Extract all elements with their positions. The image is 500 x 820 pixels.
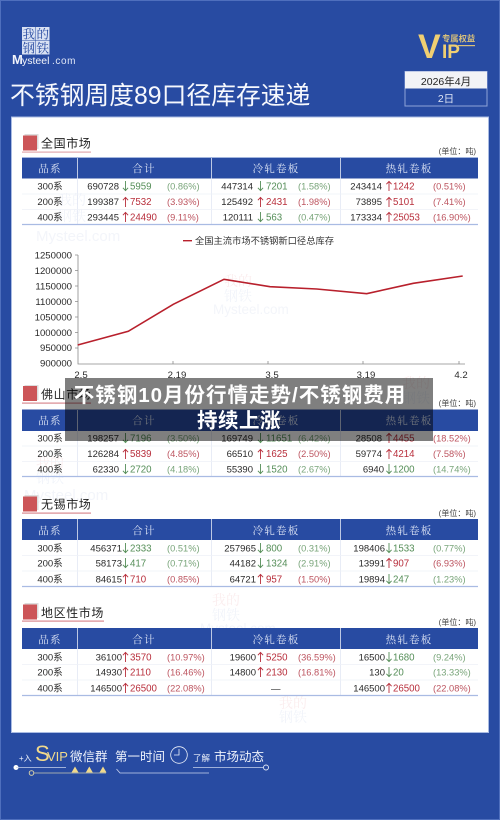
table: 全国市场: (1.98%) [298,197,331,207]
line chart: 900000 [40,358,72,370]
table: 佛山市场 [22,410,478,476]
logo: Mysteel: 我 [22,26,36,42]
section heading: 地区性市场: 地区性市场 [41,605,104,620]
table: 佛山市场: 200系 [37,449,63,460]
table: 地区性市场: 冷轧卷板 [253,633,299,646]
table: 无锡市场: 710 [130,574,147,586]
line chart: 4.2 [454,370,468,381]
table: 无锡市场: 44182 [230,558,256,570]
table: 无锡市场: 257965 [224,544,256,554]
table: 全国市场: (0.51%) [433,182,466,192]
table: 佛山市场: (14.74%) [433,464,471,474]
table: 全国市场: 合计 [132,162,156,175]
table: 地区性市场: (13.33%) [433,668,471,678]
unit label: (单位：吨) [439,508,476,518]
watermarks [24,193,430,726]
logo: Mysteel: 钢 [22,42,35,56]
table: 地区性市场: 300系 [37,652,63,664]
logo: Mysteel: .com [52,56,76,67]
section heading: 佛山市场: 佛山市场 [41,386,91,402]
footer decoration lines [14,765,268,775]
watermarks: Mysteel.com [200,621,276,636]
table: 佛山市场: (4.18%) [167,464,200,474]
footer banner: 市场动态 [214,749,264,764]
table: 无锡市场: 热轧卷板 [386,524,432,537]
table: 地区性市场: 146500 [353,684,385,694]
table: 全国市场: 563 [266,212,282,224]
table: 佛山市场: 28508 [356,434,382,444]
table: 全国市场: 300系 [37,182,63,192]
table: 全国市场: 400系 [37,212,63,224]
watermarks: Mysteel.com [24,487,108,504]
table: 无锡市场: 19894 [359,574,385,586]
table: 地区性市场: 400系 [37,684,63,694]
table: 全国市场: (0.47%) [298,212,331,222]
table: 地区性市场: 5250 [266,652,288,664]
table: 全国市场: 品系 [38,162,62,175]
table: 地区性市场: — [271,684,281,694]
table: 地区性市场: 200系 [37,668,63,678]
watermarks: 我的 [224,274,252,290]
table: 佛山市场: 62330 [93,464,119,476]
logo: Mysteel [12,26,76,67]
watermarks: 我的 [402,376,430,392]
table: 无锡市场: 907 [393,558,409,570]
table: 地区性市场: 14800 [230,668,256,678]
logo: VIP: IP [442,42,460,63]
table: 无锡市场: 冷轧卷板 [253,524,299,537]
table: 佛山市场: 6940 [363,464,384,476]
table: 地区性市场: 品系 [38,633,62,646]
section heading: 佛山市场 [22,385,91,404]
table: 佛山市场: (3.50%) [167,434,200,444]
table: 无锡市场: (0.77%) [433,544,466,554]
table: 全国市场: (7.41%) [433,197,466,207]
table: 全国市场: 25053 [393,212,420,224]
table: 全国市场: 120111 [223,212,253,224]
table: 地区性市场: (10.97%) [167,652,205,662]
footer banner: +入 [19,754,32,763]
unit label: (单位：吨) [439,398,476,408]
table: 全国市场: 243414 [350,182,382,192]
footer banner: 微信群 [70,750,108,764]
table: 无锡市场: (1.23%) [433,574,466,584]
table: 地区性市场: 146500 [90,684,122,694]
logo: VIP: 专属权益 [442,34,475,44]
table: 无锡市场: (0.71%) [167,558,200,568]
table: 全国市场: 7532 [130,197,152,208]
watermarks: 钢铁 [402,390,430,407]
white panel [12,117,488,732]
table: 地区性市场: 2130 [266,668,288,678]
table: 无锡市场: 13991 [359,558,385,570]
table: 佛山市场: 4455 [393,434,415,444]
line chart: 1200000 [35,266,72,277]
table: 无锡市场: 1324 [266,558,288,570]
line chart: 950000 [40,343,72,354]
table: 全国市场: 冷轧卷板 [253,162,299,175]
table: 地区性市场: 14930 [96,668,122,678]
watermarks: 钢铁 [212,607,240,624]
table: 地区性市场: (22.08%) [167,684,205,694]
table: 无锡市场: (1.50%) [298,574,331,584]
logo: VIP: V [418,28,441,66]
logo: VIP [418,28,475,66]
table: 佛山市场: 2720 [130,464,152,476]
table: 佛山市场: (4.85%) [167,449,200,459]
table: 佛山市场: 59774 [356,449,382,460]
unit label: (单位：吨) [439,146,476,156]
table: 全国市场: 5959 [130,182,152,192]
table: 佛山市场: 7196 [130,434,152,444]
table: 佛山市场: 1625 [266,449,288,460]
line chart: 2.19 [168,370,186,381]
table: 无锡市场: 300系 [37,544,63,554]
table: 全国市场: (16.90%) [433,212,471,222]
chart legend: 全国主流市场不锈钢新口径总库存 [195,235,334,246]
watermarks: 我的 [36,456,64,472]
watermarks: 钢铁 [36,470,64,487]
table: 无锡市场: 456371 [90,544,122,554]
table: 全国市场: 199387 [87,197,119,208]
line chart: 1000000 [35,328,72,339]
table: 佛山市场: 66510 [227,449,253,460]
table: 地区性市场: 19600 [230,652,256,664]
icon: clock [171,747,187,763]
table: 全国市场: (9.11%) [167,212,199,222]
table: 全国市场: 690728 [87,182,119,192]
table: 全国市场: (1.58%) [298,182,331,192]
table: 全国市场: 7201 [266,182,288,192]
table: 地区性市场: 3570 [130,652,152,664]
table: 无锡市场: 200系 [37,558,63,570]
table: 地区性市场: 1680 [393,652,415,664]
table: 佛山市场: 300系 [37,434,63,444]
table: 地区性市场: (16.81%) [298,668,336,678]
table: 佛山市场: 400系 [37,464,63,476]
table: 地区性市场: 16500 [359,652,385,664]
table: 无锡市场: 1533 [393,544,415,554]
table: 全国市场: 73895 [356,197,382,208]
table: 佛山市场: 4214 [393,449,415,460]
table: 无锡市场: (2.91%) [298,558,331,568]
table: 佛山市场: 169749 [221,434,253,444]
table: 佛山市场: 126284 [87,449,119,460]
table: 无锡市场: 800 [266,544,283,554]
table: 佛山市场: (7.58%) [433,449,466,459]
watermarks: 我的 [58,193,86,209]
data line [78,276,463,345]
line chart: 1050000 [35,312,72,324]
section heading: 全国市场: 全国市场 [41,136,91,150]
table: 无锡市场: 合计 [132,524,156,537]
table: 全国市场: 1242 [393,182,415,192]
table: 地区性市场: (22.08%) [433,684,471,694]
table: 佛山市场: 合计 [132,414,156,427]
section heading: 无锡市场 [22,495,91,514]
table: 地区性市场: 合计 [132,633,156,646]
table: 佛山市场: (18.52%) [433,434,471,444]
table: 地区性市场: (36.59%) [298,652,336,662]
footer banner [14,741,268,775]
table: 全国市场: 5101 [393,197,415,208]
table: 地区性市场: 2110 [130,668,151,678]
footer banner: 了解 [193,753,211,763]
footer banner: VIP [47,749,68,764]
overlay caption: 不锈钢10月份行情走势/不锈钢费用 [74,384,406,407]
overlay caption: 持续上涨 [197,410,281,432]
table: 全国市场: 447314 [221,182,253,192]
table: 无锡市场: 400系 [37,574,63,586]
table: 全国市场: 293445 [87,212,119,224]
logo: Mysteel: 的 [36,28,49,42]
watermarks: 钢铁 [58,208,86,225]
table: 全国市场: 热轧卷板 [386,162,432,175]
table: 全国市场: 200系 [37,197,63,208]
table: 佛山市场: (2.67%) [298,464,331,474]
date box: 2026年4月 [421,75,471,88]
table: 全国市场: 2431 [266,197,288,208]
section heading: 全国市场 [22,134,91,153]
table: 地区性市场: 36100 [96,652,122,664]
watermarks: 我的 [279,696,307,712]
table: 无锡市场: 247 [393,574,409,586]
table: 地区性市场: (9.24%) [433,652,466,662]
table: 无锡市场: 957 [266,574,282,586]
table: 无锡市场: (6.93%) [433,558,466,568]
table: 地区性市场: 26500 [130,684,158,694]
table: 无锡市场 [22,519,478,586]
table: 全国市场: 125492 [221,197,253,208]
table: 佛山市场: 55390 [227,464,253,476]
table: 无锡市场: 58173 [96,558,122,570]
section heading: 地区性市场 [22,603,104,622]
table: 佛山市场: 5839 [130,449,152,460]
table: 佛山市场: 11651 [266,434,292,444]
table: 无锡市场: 2333 [130,544,152,554]
table: 全国市场: (0.86%) [167,182,200,192]
watermarks: Mysteel.com [36,228,120,245]
table: 佛山市场: 1520 [266,464,288,476]
watermarks: Mysteel.com [213,302,289,317]
table: 地区性市场: 26500 [393,684,421,694]
table: 无锡市场: (0.31%) [298,544,331,554]
line chart: 1250000 [35,250,72,262]
footer banner: S [35,741,50,766]
title: 不锈钢周度89口径库存速递 [10,82,310,110]
logo: Mysteel: M [12,52,23,67]
watermarks: 我的 [212,593,240,609]
line chart: 1150000 [35,282,72,292]
line chart: 3.5 [265,370,279,381]
table: 全国市场: 173334 [350,212,382,224]
line chart: 2.5 [74,370,88,381]
table: 无锡市场: (0.51%) [167,544,200,554]
table: 无锡市场: 84615 [96,574,122,586]
table: 地区性市场 [22,628,478,696]
logo: Mysteel: ysteel [22,55,49,67]
table: 无锡市场: 64721 [230,574,256,586]
watermarks: 钢铁 [279,709,307,726]
table: 全国市场: 24490 [130,212,158,224]
overlay caption [65,378,433,441]
line chart [35,235,468,381]
line chart: 3.19 [357,370,375,381]
footer banner: 第一时间 [115,750,165,764]
table: 佛山市场: 冷轧卷板 [253,414,299,427]
table: 佛山市场: (2.50%) [298,449,331,459]
table: 佛山市场: 1200 [393,464,415,476]
date box: 2日 [438,93,454,105]
table: 地区性市场: 130 [369,668,385,678]
table: 地区性市场: 20 [393,668,404,678]
table: 无锡市场: 品系 [38,524,62,537]
table: 无锡市场: 198406 [353,544,385,554]
table: 佛山市场: (6.42%) [298,434,331,444]
table: 无锡市场: (0.85%) [167,574,200,584]
table: 无锡市场: 417 [130,558,146,570]
logo: Mysteel: 铁 [36,40,50,56]
section heading: 无锡市场: 无锡市场 [41,496,91,512]
date box [405,72,487,106]
line chart: 1100000 [35,297,72,308]
unit label: (单位：吨) [439,617,476,627]
table: 地区性市场: (16.46%) [167,668,205,678]
table: 全国市场 [22,158,478,224]
table: 佛山市场: 198257 [87,434,119,444]
watermarks: 钢铁 [224,288,252,305]
table: 佛山市场: 品系 [38,414,62,427]
table: 全国市场: (3.93%) [167,197,200,207]
table: 地区性市场: 热轧卷板 [386,633,432,646]
table: 佛山市场: 热轧卷板 [386,414,432,427]
